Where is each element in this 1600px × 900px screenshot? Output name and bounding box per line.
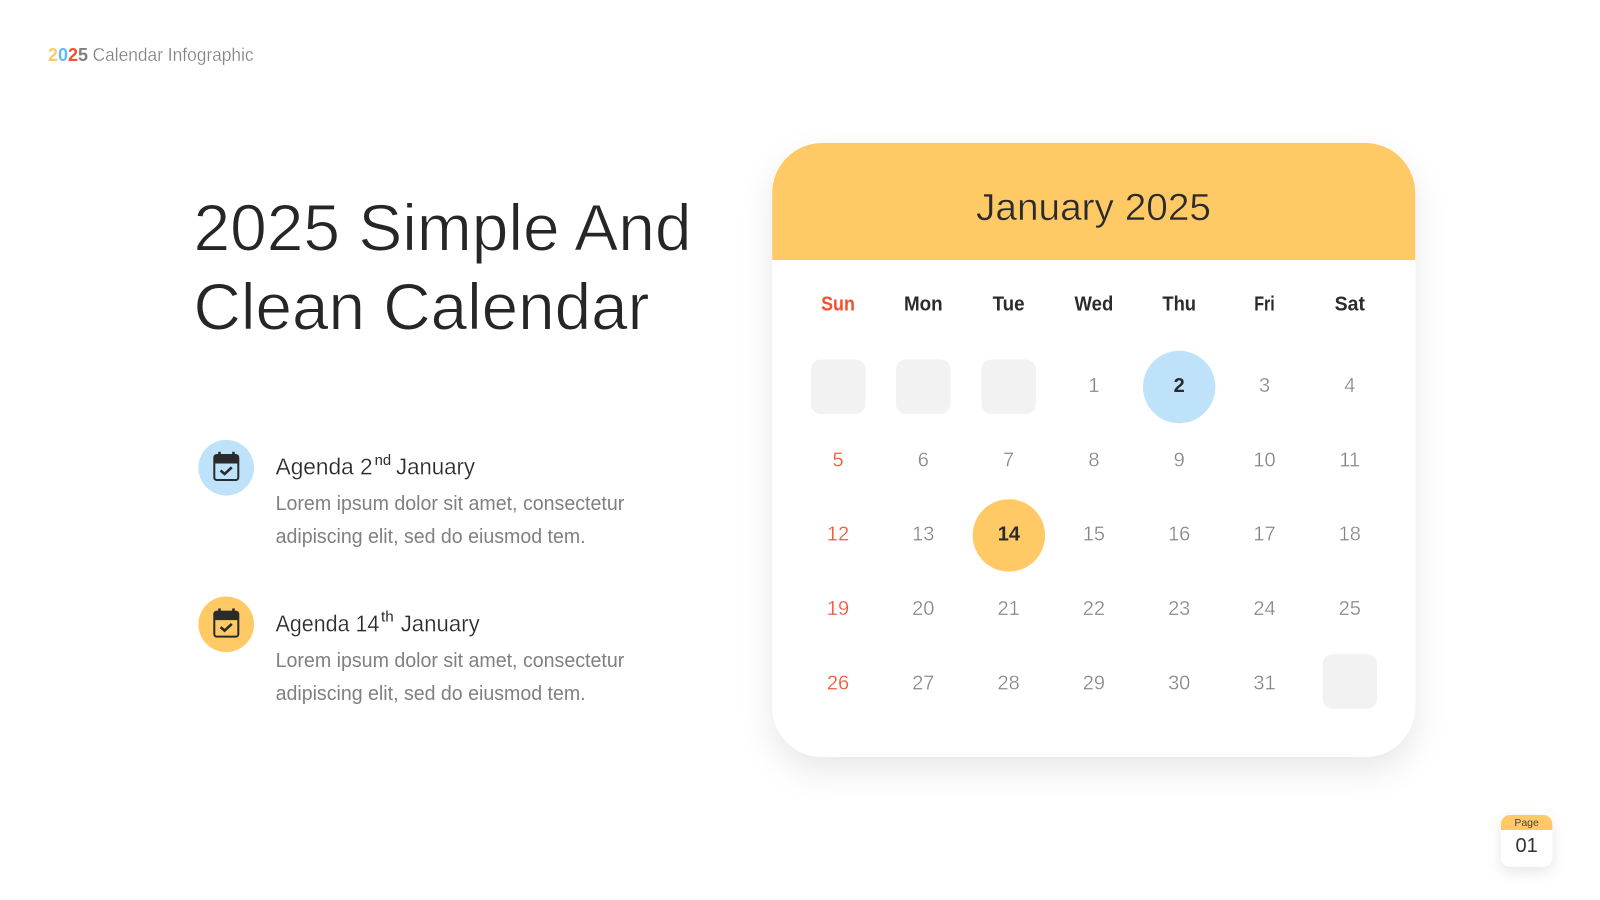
text block: description: adipiscing elit, sed do eiusmod tem.	[276, 526, 586, 548]
highlight: January 2	[1143, 351, 1215, 423]
day numbers: 25	[1339, 598, 1361, 620]
day numbers: 11	[1339, 449, 1360, 471]
day numbers: 23	[1168, 598, 1190, 620]
weekday headers: Sun	[821, 294, 855, 316]
top label: 2025 Calendar Infographic: 2025	[48, 45, 88, 65]
day numbers: 6	[918, 449, 929, 471]
heading: Agenda 2nd January: nd	[375, 453, 391, 469]
day numbers: 17	[1253, 524, 1276, 546]
day numbers: 8	[1088, 449, 1099, 471]
heading: Agenda 2nd January: January	[396, 454, 475, 480]
title	[194, 190, 692, 344]
text block: description: Lorem ipsum dolor sit amet, consectetur	[276, 493, 625, 515]
weekday headers: Wed	[1075, 294, 1113, 316]
day numbers: 18	[1339, 524, 1361, 546]
day numbers: 19	[827, 598, 849, 620]
day numbers: 20	[912, 598, 934, 620]
day numbers: 24	[1253, 598, 1276, 620]
heading: Agenda 2nd January: Agenda 2	[276, 454, 373, 480]
card background	[772, 143, 1415, 757]
weekday headers: Fri	[1254, 294, 1275, 316]
text block: description: adipiscing elit, sed do eiusmod tem.	[276, 683, 586, 705]
day numbers: 21	[997, 598, 1020, 620]
day numbers: 4	[1344, 375, 1355, 397]
panel: calendar card	[772, 143, 1415, 757]
day numbers: 22	[1083, 598, 1105, 620]
day numbers: 3	[1259, 375, 1270, 397]
icon: yellow calendar check	[198, 596, 254, 652]
heading: Agenda 2nd January	[276, 453, 475, 480]
day numbers	[827, 375, 1361, 694]
page badge: Page	[1514, 817, 1539, 829]
day numbers: 30	[1168, 672, 1190, 694]
day numbers: 26	[827, 672, 849, 694]
text block: description: Lorem ipsum dolor sit amet, consectetur	[276, 650, 625, 672]
day numbers: 7	[1003, 449, 1014, 471]
heading: Agenda 14th January: January	[401, 610, 480, 636]
day numbers: 9	[1174, 449, 1185, 471]
agenda item: 2nd January	[198, 440, 625, 548]
day numbers: 16	[1168, 524, 1190, 546]
month title: January 2025	[976, 187, 1211, 229]
day numbers: 31	[1253, 672, 1276, 694]
weekday headers: Thu	[1162, 294, 1196, 316]
day numbers: 28	[997, 672, 1020, 694]
card header band	[772, 143, 1415, 260]
day numbers: 5	[832, 449, 844, 471]
day numbers: 27	[912, 672, 934, 694]
page badge	[1501, 815, 1552, 867]
heading: Agenda 14th January	[276, 610, 480, 636]
icon: blue calendar check	[198, 440, 254, 496]
text block: description	[276, 493, 625, 548]
agenda item: 14th January	[198, 596, 625, 705]
empty day cells	[811, 360, 1377, 709]
day numbers: 1	[1088, 375, 1099, 397]
highlight: January 14: 14	[998, 524, 1021, 546]
day numbers: 10	[1253, 449, 1276, 471]
day numbers: 15	[1083, 524, 1105, 546]
weekday headers: Tue	[993, 294, 1025, 316]
text block: description	[276, 650, 625, 705]
highlight: January 2: 2	[1174, 375, 1185, 397]
weekday headers	[821, 294, 1365, 316]
title: 2025 Simple And	[194, 190, 692, 264]
weekday headers: Mon	[904, 294, 943, 316]
top label: 2025 Calendar Infographic: Calendar Infographic	[93, 45, 254, 65]
title: Clean Calendar	[194, 270, 650, 344]
day numbers: 12	[827, 524, 849, 546]
page badge: 01	[1515, 835, 1538, 857]
day numbers: 29	[1083, 672, 1105, 694]
weekday headers: Sat	[1335, 294, 1365, 316]
heading: Agenda 14th January: th	[381, 610, 394, 626]
heading: Agenda 14th January: Agenda 14	[276, 610, 379, 636]
highlight: January 14	[973, 499, 1045, 572]
day numbers: 13	[912, 524, 934, 546]
